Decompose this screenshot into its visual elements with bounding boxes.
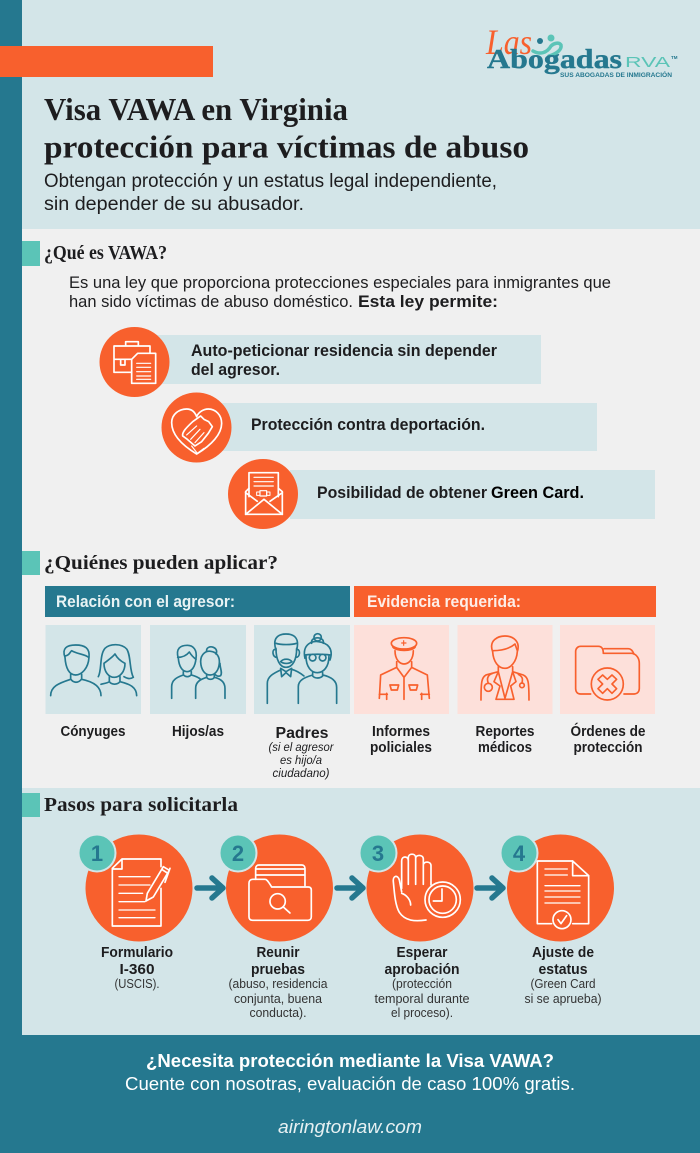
arrow 2 to 3 bbox=[337, 878, 363, 898]
label: Hijos/as bbox=[172, 724, 224, 740]
number badge bbox=[360, 834, 396, 872]
subtitle: Obtengan protección y un estatus legal independiente, bbox=[44, 170, 497, 192]
orange accent bar bbox=[0, 46, 213, 77]
label bbox=[268, 725, 335, 780]
benefit row 3 bbox=[228, 459, 655, 529]
icon: couple bbox=[51, 645, 137, 696]
step label: (abuso, residencia bbox=[228, 977, 328, 991]
benefit row 1 bbox=[100, 327, 541, 397]
benefit text bbox=[191, 342, 498, 379]
label: Cónyuges bbox=[60, 724, 126, 740]
intro text: Esta ley permite: bbox=[358, 292, 498, 311]
icon: doctor bbox=[481, 636, 529, 700]
step label: conducta). bbox=[250, 1006, 306, 1020]
label: Órdenes de bbox=[570, 722, 646, 740]
panel: footer call to action bbox=[0, 1035, 700, 1153]
benefit text bbox=[317, 484, 584, 502]
step label: pruebas bbox=[251, 962, 305, 978]
header bar: relacion: Relación con el agresor: bbox=[56, 593, 235, 611]
header bar: evidencia bbox=[354, 586, 656, 617]
step label bbox=[524, 945, 602, 1006]
label: médicos bbox=[478, 740, 532, 756]
icon: form and pen bbox=[112, 859, 170, 926]
subtitle: sin depender de su abusador. bbox=[44, 193, 304, 215]
icon: briefcase and document bbox=[100, 327, 170, 397]
step label: Reunir bbox=[256, 945, 300, 961]
icon: approved document bbox=[537, 861, 589, 929]
step label: Esperar bbox=[396, 945, 448, 961]
header bar: relacion bbox=[45, 586, 350, 617]
title bbox=[44, 91, 529, 164]
intro text: han sido víctimas de abuso doméstico. bbox=[69, 293, 353, 311]
label: policiales bbox=[370, 740, 432, 756]
icon: raised hand and clock bbox=[393, 854, 460, 921]
step label: si se aprueba) bbox=[524, 992, 602, 1006]
benefit row 2 bbox=[162, 392, 597, 462]
logo: TM bbox=[671, 55, 678, 60]
heading: ¿Qué es VAWA? bbox=[44, 242, 167, 264]
logo: Abogadas bbox=[487, 44, 622, 74]
panel: quienes pueden aplicar bbox=[22, 551, 656, 780]
step label: temporal durante bbox=[374, 992, 470, 1006]
heading: ¿Quiénes pueden aplicar? bbox=[44, 552, 278, 574]
step label bbox=[101, 945, 173, 991]
number badge bbox=[220, 834, 256, 872]
step label: (Green Card bbox=[530, 977, 596, 991]
step label: Ajuste de bbox=[532, 945, 594, 961]
panel: pasos para solicitarla bbox=[22, 788, 700, 1035]
arrow 1 to 2 bbox=[197, 878, 223, 898]
step label: conjunta, buena bbox=[234, 992, 322, 1006]
step label: estatus bbox=[538, 962, 588, 978]
title: Visa VAWA en Virginia bbox=[44, 91, 348, 127]
website: airingtonlaw.com bbox=[278, 1117, 422, 1137]
card: reportes medicos bbox=[458, 625, 552, 756]
card: informes policiales bbox=[354, 625, 449, 756]
step label: (protección bbox=[392, 977, 452, 991]
logo: SUS ABOGADAS DE INMIGRACIÓN bbox=[560, 70, 672, 79]
arrow 3 to 4 bbox=[477, 878, 503, 898]
section marker bbox=[22, 551, 40, 575]
title: protección para víctimas de abuso bbox=[44, 128, 529, 164]
step 1 bbox=[78, 834, 192, 991]
icon: folder with x bbox=[576, 646, 639, 700]
label: es hijo/a bbox=[280, 755, 322, 767]
number badge: 3 bbox=[372, 841, 384, 866]
step label: (USCIS). bbox=[114, 977, 160, 991]
step 2 bbox=[220, 834, 333, 1020]
icon: police officer bbox=[379, 638, 429, 699]
benefit text: Green Card. bbox=[491, 484, 584, 502]
section marker bbox=[22, 241, 40, 266]
section marker bbox=[22, 793, 40, 817]
call to action text: ¿Necesita protección mediante la Visa VAWA? bbox=[146, 1051, 554, 1071]
step label: Formulario bbox=[101, 945, 173, 961]
card: conyuges bbox=[46, 625, 141, 740]
number badge: 2 bbox=[232, 841, 244, 866]
label bbox=[370, 724, 432, 756]
step 3 bbox=[360, 834, 474, 1020]
icon: children bbox=[172, 645, 225, 698]
icon: parents bbox=[267, 634, 337, 703]
step label bbox=[374, 945, 470, 1020]
call to action text bbox=[125, 1051, 575, 1094]
benefit text: del agresor. bbox=[191, 361, 280, 379]
number badge: 1 bbox=[91, 841, 103, 866]
logo bbox=[485, 22, 678, 79]
call to action text: Cuente con nosotras, evaluación de caso 100% gratis. bbox=[125, 1074, 575, 1094]
number badge bbox=[78, 834, 116, 872]
card: padres bbox=[254, 625, 350, 780]
label: Padres bbox=[276, 725, 329, 742]
label bbox=[570, 722, 646, 756]
label bbox=[476, 724, 534, 756]
number badge bbox=[500, 834, 538, 872]
step label bbox=[228, 945, 328, 1020]
number badge: 4 bbox=[513, 841, 526, 866]
step label: aprobación bbox=[384, 962, 460, 978]
subtitle bbox=[44, 170, 497, 215]
card: ordenes de proteccion bbox=[560, 625, 655, 756]
heading: Pasos para solicitarla bbox=[44, 794, 238, 816]
icon: folder with magnifier bbox=[249, 865, 311, 920]
benefit text: Protección contra deportación. bbox=[251, 416, 485, 434]
label: Reportes bbox=[476, 724, 534, 740]
icon: heart with hands bbox=[162, 392, 232, 462]
intro text: Es una ley que proporciona protecciones especiales para inmigrantes que bbox=[69, 274, 611, 292]
logo: RVA bbox=[625, 54, 670, 71]
benefit text: Auto-peticionar residencia sin depender bbox=[191, 342, 498, 360]
panel: header bbox=[0, 0, 700, 229]
card: hijos bbox=[150, 625, 246, 740]
benefit text: Posibilidad de obtener bbox=[317, 484, 488, 502]
label: Informes bbox=[372, 724, 430, 740]
label: (si el agresor bbox=[268, 742, 335, 754]
step label: I-360 bbox=[120, 962, 154, 978]
label: ciudadano) bbox=[272, 768, 330, 780]
icon: envelope bbox=[228, 459, 298, 529]
intro text bbox=[69, 274, 611, 311]
panel: que es VAWA bbox=[22, 241, 655, 529]
step 4 bbox=[500, 834, 614, 1006]
header bar: evidencia: Evidencia requerida: bbox=[367, 593, 521, 611]
step label: el proceso). bbox=[391, 1006, 453, 1020]
logo: Las bbox=[485, 22, 532, 62]
label: protección bbox=[574, 740, 642, 756]
